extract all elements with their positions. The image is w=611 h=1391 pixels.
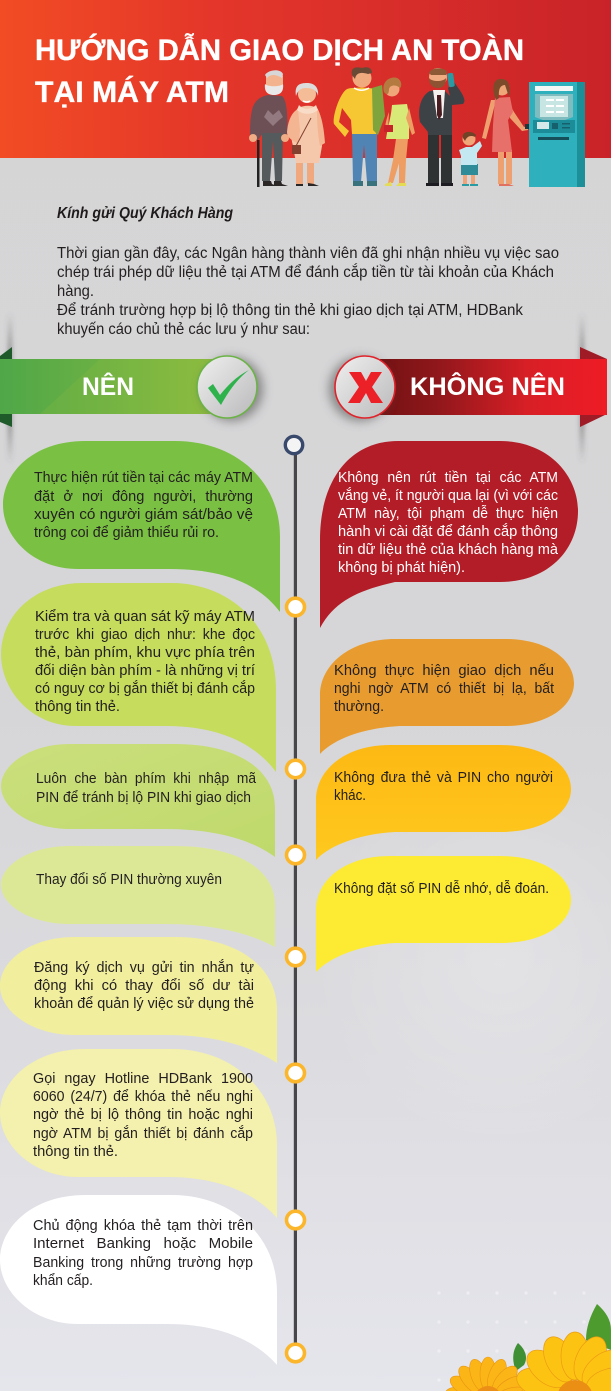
right bubble 1: vắng vẻ, ít người qua lại (vì với các xyxy=(338,487,558,504)
title xyxy=(35,33,524,109)
left bubble 1: đặt ở nơi đông người, thường xyxy=(34,489,253,505)
right bubble 4: Không đặt số PIN dễ nhớ, dễ đoán. xyxy=(334,880,549,897)
right bubble 2 xyxy=(320,639,574,754)
paper edge shadows xyxy=(8,313,584,463)
left bubble 1 xyxy=(3,441,280,612)
intro paragraph xyxy=(57,245,559,338)
banner: NÊN xyxy=(0,347,263,427)
left bubble 2: thông tin thẻ. xyxy=(35,699,120,715)
right bubble 2: thường. xyxy=(334,699,384,715)
label: NÊN: NÊN xyxy=(82,371,134,401)
left bubble 6: 6060 (24/7) để khóa thẻ nếu nghi xyxy=(33,1089,253,1105)
header banner xyxy=(0,0,611,158)
left bubble 2: Kiểm tra và quan sát kỹ máy ATM xyxy=(35,609,255,625)
figure: child xyxy=(459,132,482,186)
right bubble 1: Không nên rút tiền tại các ATM xyxy=(338,470,558,486)
left bubble 5: Đăng ký dịch vụ gửi tin nhắn tự xyxy=(34,959,254,976)
title: TẠI MÁY ATM xyxy=(35,75,229,109)
left bubble 2: trước khi giao dịch như: khe đọc xyxy=(35,627,255,643)
greeting: Kính gửi Quý Khách Hàng xyxy=(57,205,233,222)
left bubble 4 xyxy=(1,846,275,947)
people illustration xyxy=(249,67,585,187)
icon: X mark xyxy=(335,356,395,418)
right bubble 3: khác. xyxy=(334,788,366,804)
figure: woman in green dress xyxy=(383,78,415,186)
right bubble 1: ATM này, tội phạm dễ thực hiện xyxy=(338,505,558,522)
intro paragraph: khuyến cáo chủ thẻ các lưu ý như sau: xyxy=(57,321,310,338)
icon: check mark xyxy=(197,356,257,418)
right bubble 1 xyxy=(320,441,578,628)
start marker xyxy=(285,436,303,454)
left bubble 7: Chủ động khóa thẻ tạm thời trên xyxy=(33,1218,253,1234)
left bubble 6: ngờ ATM bị gắn thiết bị đánh cắp xyxy=(33,1125,253,1142)
left bubble 4: Thay đổi số PIN thường xuyên xyxy=(36,872,222,888)
left bubble 1: trông coi để giảm thiểu rủi ro. xyxy=(34,525,219,541)
left bubble 7: Banking trong những trường hợp xyxy=(33,1255,253,1271)
left bubble 7: khẩn cấp. xyxy=(33,1273,93,1289)
intro paragraph: Để tránh trường hợp bị lộ thông tin thẻ khi giao dịch tại ATM, HDBank xyxy=(57,302,523,319)
left bubble 6 xyxy=(0,1049,277,1218)
left bubble 5 xyxy=(0,937,277,1063)
figure: man in suit with phone xyxy=(419,68,464,186)
left bubble 5: khoản để quản lý việc sử dụng thẻ xyxy=(34,996,254,1012)
left bubble 2: có nguy cơ bị gắn thiết bị đánh cắp xyxy=(35,680,255,697)
title: HƯỚNG DẪN GIAO DỊCH AN TOÀN xyxy=(35,33,524,67)
left bubble 7 xyxy=(0,1195,277,1365)
left bubble 3 xyxy=(1,744,275,857)
left bubble 3: Luôn che bàn phím khi nhập mã xyxy=(36,771,257,787)
right bubble 4 xyxy=(316,856,571,972)
left bubble 2: thẻ, bàn phím, khu vực phía trên xyxy=(35,645,255,661)
figure: old woman xyxy=(287,83,325,186)
figure: woman with card at the ATM xyxy=(482,79,531,186)
intro paragraph: Thời gian gần đây, các Ngân hàng thành viên đã ghi nhận nhiều vụ việc sao xyxy=(57,245,559,262)
intro paragraph: chép trái phép dữ liệu thẻ tại ATM để đánh cắp tiền từ tài khoản của Khách xyxy=(57,264,554,281)
left bubble 1: Thực hiện rút tiền tại các máy ATM xyxy=(34,470,253,486)
left bubble 7: Internet Banking hoặc Mobile xyxy=(33,1236,253,1252)
right bubble 2: nghi ngờ ATM có thiết bị lạ, bất xyxy=(334,681,554,697)
label: KHÔNG NÊN: KHÔNG NÊN xyxy=(410,371,565,401)
left bubble 5: động khi có thay đổi số dư tài xyxy=(34,978,254,994)
right bubble 2: Không thực hiện giao dịch nếu xyxy=(334,663,554,679)
markers xyxy=(286,598,304,1362)
intro paragraph: hàng. xyxy=(57,283,94,300)
timeline xyxy=(285,436,304,1362)
left bubble 6: ngờ thẻ bị lộ thông tin hoặc nghi xyxy=(33,1107,253,1123)
left bubble 1: xuyên có người giám sát/bảo vệ xyxy=(34,507,253,523)
left bubble 6: thông tin thẻ. xyxy=(33,1144,118,1160)
right bubble 1: hành vi cài đặt để đánh cắp thông xyxy=(338,523,558,540)
left bubble 2 xyxy=(1,583,276,772)
figure: old man with cane xyxy=(249,70,289,187)
decoration: sunflowers and leaves xyxy=(444,1304,611,1391)
left bubble 2: đối diện bàn phím - là những vị trí xyxy=(35,663,255,679)
left bubble 6: Gọi ngay Hotline HDBank 1900 xyxy=(33,1071,253,1087)
right bubble 3: Không đưa thẻ và PIN cho người xyxy=(334,770,553,786)
right bubble 3 xyxy=(316,745,571,860)
banner: KHÔNG NÊN xyxy=(329,347,607,427)
icon: ATM machine xyxy=(529,82,585,187)
right bubble 1: tin dữ liệu thẻ của khách hàng mà xyxy=(338,542,559,558)
right bubble 1: không bị phát hiện). xyxy=(338,560,465,576)
left bubble 3: PIN để tránh bị lộ PIN khi giao dịch xyxy=(36,790,251,806)
figure: man in yellow sweater xyxy=(334,67,385,186)
